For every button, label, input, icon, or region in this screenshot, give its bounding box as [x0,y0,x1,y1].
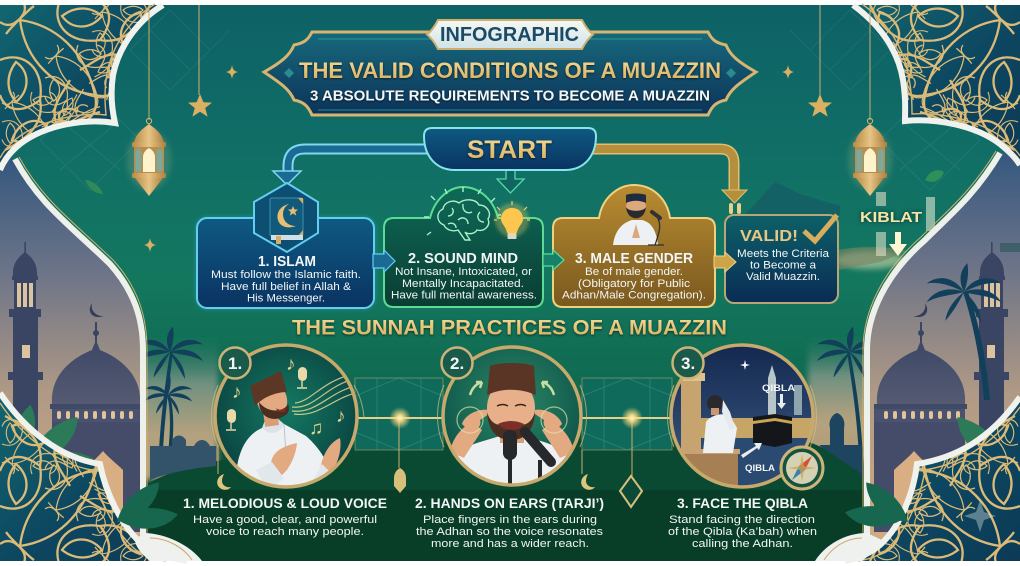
distant minarets [768,365,776,415]
sunnah heading: THE SUNNAH PRACTICES OF A MUAZZIN [292,316,727,340]
icon: quran in hexagon [254,183,318,252]
panel: valid: VALID! [740,228,798,245]
sound arrows [470,382,482,395]
music notes [234,359,344,434]
panel: 2. Sound mind [384,187,543,307]
qibla arrows [741,394,786,458]
caption 3: 3. FACE THE QIBLA [677,496,808,511]
icon: check mark [804,215,837,241]
bottom leaves [117,482,908,547]
minaret and balcony [681,380,701,455]
music notes: ♪ [232,382,242,403]
badge 3: 3. [681,354,695,373]
connector: circle 1 to circle 2 [355,378,443,493]
caption 2: 2. HANDS ON EARS (TARJI’) [415,496,604,511]
robe [457,436,567,484]
panel: valid: Valid Muazzin. [746,271,820,283]
panel: 1. Islam [197,183,374,308]
scene: kiblat horizon [745,170,944,270]
caption 3: calling the Adhan. [692,538,793,550]
arrow: start to valid [590,149,747,214]
panel: 3. Male gender [553,185,715,307]
ground [738,450,788,486]
corner ornament: bottom right [815,397,1020,566]
colonnade [700,418,820,438]
singer [237,424,324,486]
connector: circle 2 to circle 3 [582,378,672,507]
badge 2: 2. [450,354,464,373]
corner ornament: top right [853,0,1020,167]
title plaque [264,32,756,115]
arrow: start to sound mind [497,168,524,193]
neck, head, cap [500,437,524,443]
icon: light bulb [494,201,530,239]
icon: praying man with microphone [613,194,664,245]
caption 2: the Adhan so the voice resonates [416,526,604,538]
music notes: ♪ [336,406,346,427]
panel: 3. Male gender: 3. MALE GENDER [575,251,694,267]
badge 2 [442,348,472,378]
infographic pill: INFOGRAPHIC [440,24,579,46]
crescents and arcs [211,385,817,490]
circle 2: hands on ears [442,346,582,492]
palm trees left [137,326,216,480]
start box: START [467,136,552,164]
caption 1: voice to reach many people. [206,526,364,538]
arrow: male gender to valid [714,252,736,272]
circle 3: face the qibla [668,344,823,490]
kiblat label: KIBLAT [860,209,922,226]
panel: valid: to Become a [750,260,816,272]
caption 3 [668,496,817,550]
panel: 3. Male gender: (Obligatory for Public [578,278,691,290]
badge 1 [220,348,250,378]
caption 3: of the Qibla (Ka’bah) when [668,526,817,538]
music notes: ♪ [286,354,296,375]
panel: 1. Islam: Have full belief in Allah & [221,281,352,293]
corner ornament: top left [0,0,167,170]
caption 1 [183,496,387,538]
subtitle: 3 ABSOLUTE REQUIREMENTS TO BECOME A MUAZZIN [310,88,710,104]
icon: geometric ornament [620,476,642,507]
caption 1: 1. MELODIOUS & LOUD VOICE [183,496,387,511]
caption 2: more and has a wider reach. [431,538,589,550]
kaaba [753,414,792,447]
arrow: start to islam [273,149,430,185]
arrow: islam to sound mind [373,250,395,272]
icon: small lantern [394,468,406,493]
qibla upper label: QIBLA [762,383,795,394]
panel: 1. Islam: 1. ISLAM [258,254,316,270]
caption 2: Place fingers in the ears during [423,514,597,526]
infographic pill [427,20,593,49]
panel: 3. Male gender: Be of male gender. [585,266,683,278]
badge 3 [672,348,704,378]
arrow: sound mind to male gender [543,250,564,270]
panel: 2. Sound mind: Have full mental awareness. [391,290,537,302]
panel: valid [725,215,838,303]
icon: brain [424,187,501,240]
caption 1: Have a good, clear, and powerful [193,514,377,526]
corner ornament: bottom left [0,393,202,566]
forearms and hands [452,426,482,458]
sound waves [292,376,352,415]
panel: 3. Male gender: Adhan/Male Congregation). [562,290,706,302]
panel: 2. Sound mind: Mentally Incapacitated. [402,278,524,290]
panel: 2. Sound mind: Not Insane, Intoxicated, or [395,266,532,278]
badge 1: 1. [228,354,242,373]
circle 1: melodious voice [214,344,362,492]
man [703,414,737,453]
panel: 1. Islam: Must follow the Islamic faith. [211,269,361,281]
stars [740,360,750,370]
qibla lower label: QIBLA [745,463,775,474]
panel: valid: Meets the Criteria [737,248,829,260]
caption 3: Stand facing the direction [669,514,815,526]
right mosque window [863,150,1020,545]
hanging lantern left [127,5,171,196]
hill and skies behind circles [140,330,870,561]
panel: 1. Islam: His Messenger. [247,292,325,304]
left mosque window [0,157,147,540]
microphones [226,367,307,430]
caption 2 [415,496,604,550]
hanging lantern right [848,5,892,196]
panel: 2. Sound mind: 2. SOUND MIND [408,251,518,267]
icon: compass [781,447,823,489]
hanging stars and sparkles [85,5,832,252]
music notes: ♫ [309,418,323,439]
start box [424,128,596,170]
palm tree and skyline right [817,326,883,478]
main title: THE VALID CONDITIONS OF A MUAZZIN [299,58,721,83]
microphones [503,430,517,460]
